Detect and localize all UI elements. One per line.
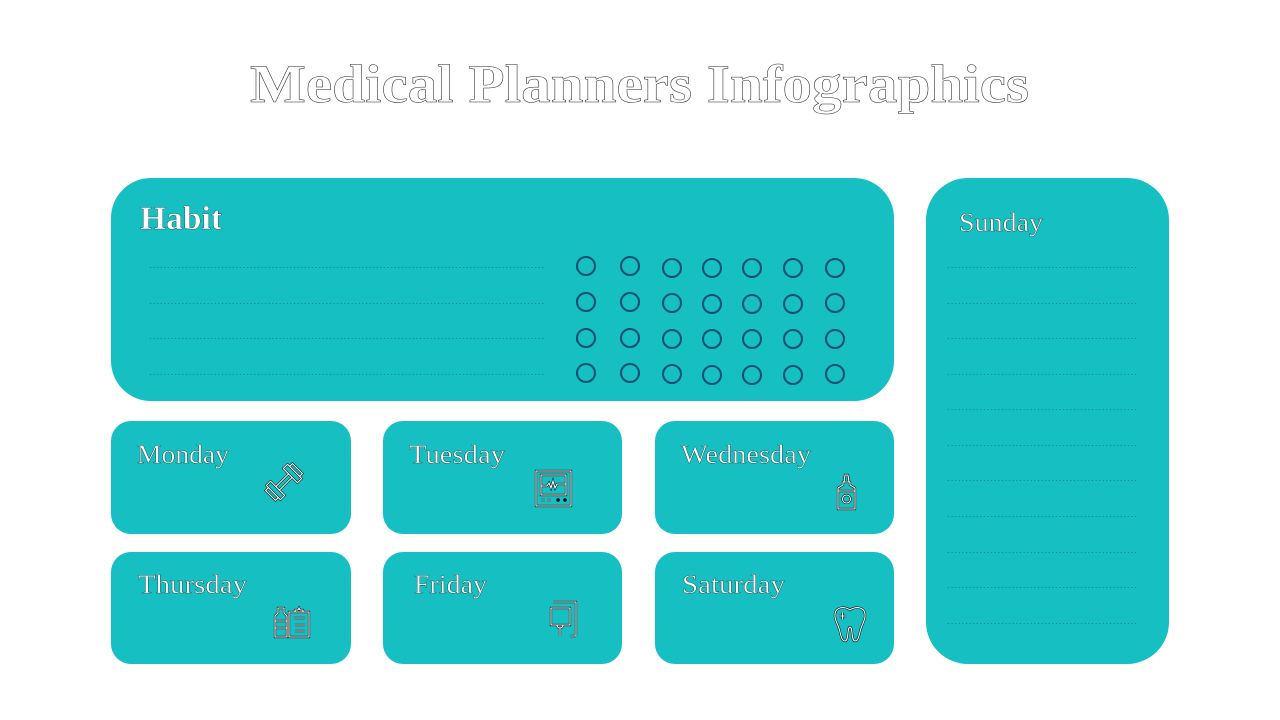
panel: friday (383, 552, 622, 664)
thursday label: Thursday (138, 570, 247, 599)
panel: thursday (111, 552, 351, 664)
icon: tooth (835, 608, 865, 641)
panel: saturday (655, 552, 894, 664)
panel: monday (111, 421, 351, 534)
habit heading: Habit (140, 201, 222, 237)
friday label: Friday (414, 570, 487, 599)
panel: sunday (926, 178, 1169, 664)
panel: tuesday (383, 421, 622, 534)
panel: habit (111, 178, 894, 401)
sunday dotted lines (948, 268, 1136, 624)
icon: medicine bottle (838, 475, 855, 509)
icon: iv drip (551, 602, 576, 636)
panel: wednesday (655, 421, 894, 534)
habit tracker circles (577, 257, 844, 384)
icon: bottle and clipboard (275, 608, 309, 637)
wednesday label: Wednesday (681, 440, 811, 469)
tuesday label: Tuesday (409, 440, 505, 469)
sunday heading: Sunday (959, 208, 1043, 237)
habit dotted lines (150, 268, 544, 374)
monday label: Monday (137, 440, 229, 469)
icon: heart monitor (536, 471, 571, 506)
saturday label: Saturday (682, 570, 785, 599)
title: Medical Planners Infographics (250, 54, 1029, 114)
icon: dumbbell (263, 461, 305, 503)
